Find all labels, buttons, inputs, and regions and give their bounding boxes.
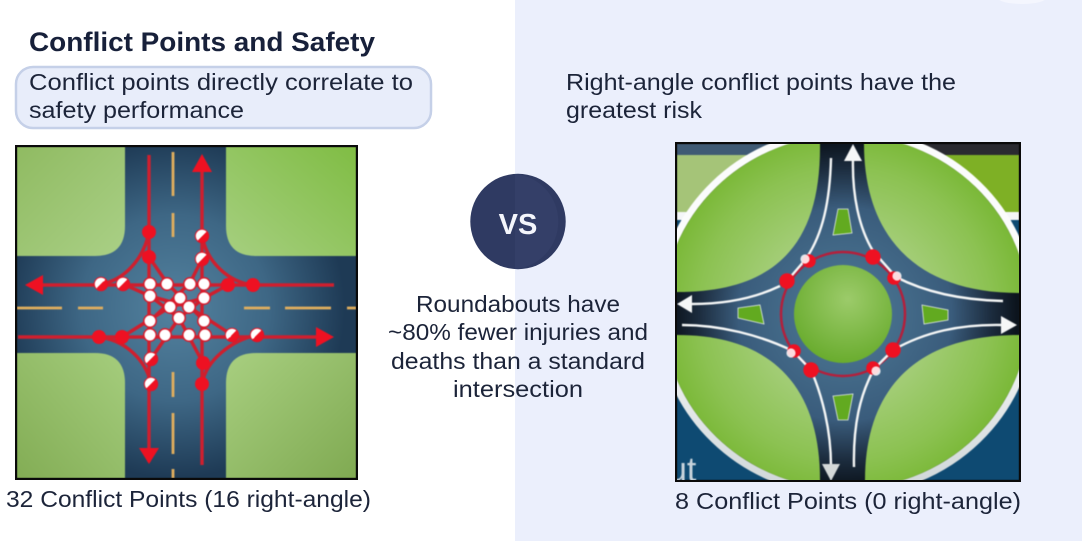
text: roundabout statistic: deaths than a standard xyxy=(391,348,645,374)
green lobes xyxy=(677,144,1019,480)
text: roundabout statistic: Roundabouts have xyxy=(416,291,620,317)
diagram: standard intersection xyxy=(15,145,358,480)
text: roundabout statistic: ~80% fewer injuries and xyxy=(388,319,648,345)
text: roundabout statistic xyxy=(388,291,648,402)
caption: roundabout: 8 Conflict Points (0 right-angle) xyxy=(675,488,1021,514)
right background panel xyxy=(515,0,1082,541)
callout: conflict points correlate: Conflict points directly correlate to xyxy=(29,69,413,95)
decorative logo remnant xyxy=(998,0,1046,4)
conflict points: diverging (half white) xyxy=(94,229,264,391)
splitter islands xyxy=(738,209,948,420)
conflict points: merging (solid red) xyxy=(92,225,260,391)
text: roundabout statistic: intersection xyxy=(453,376,583,402)
conflict points xyxy=(779,249,901,378)
conflict points: crossing (white) xyxy=(144,278,211,341)
VS badge xyxy=(470,174,566,269)
diagram: roundabout xyxy=(675,142,1021,482)
traffic paths xyxy=(682,158,1003,467)
text: right-angle risk: greatest risk xyxy=(566,97,703,123)
caption: intersection: 32 Conflict Points (16 right-angle) xyxy=(6,486,371,512)
text: right-angle risk xyxy=(566,69,956,123)
VS badge: VS xyxy=(499,209,537,241)
central island xyxy=(794,265,892,363)
title: Conflict Points and Safety xyxy=(29,27,375,57)
callout: conflict points correlate: safety performance xyxy=(29,97,244,123)
text: right-angle risk: Right-angle conflict points have the xyxy=(566,69,956,95)
circulating ring xyxy=(781,252,905,376)
watermark fragment: ut xyxy=(668,451,697,489)
callout: conflict points correlate xyxy=(16,67,431,128)
